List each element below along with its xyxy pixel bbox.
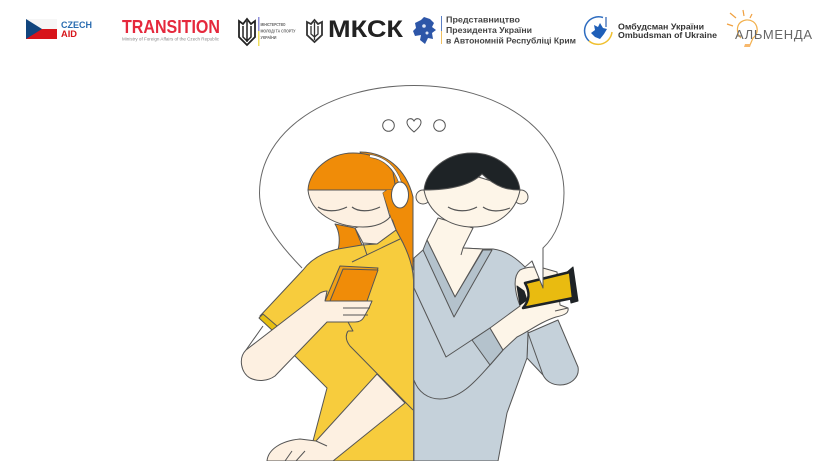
logo: Ministry of Youth and Sports: УКРАЇНИ <box>260 34 276 40</box>
logo: MKSK: МКСК <box>328 16 403 43</box>
logo: Ombudsman of Ukraine <box>585 17 718 44</box>
man ears <box>416 190 430 204</box>
logo: Transition: TRANSITION <box>122 16 220 37</box>
logo: Transition: Ministry of Foreign Affairs of the Czech Republic <box>122 36 220 42</box>
woman back hair <box>335 224 362 250</box>
woman torso and sleeve <box>260 230 414 461</box>
woman bottom forearm <box>267 374 405 461</box>
woman front hair <box>308 153 396 190</box>
woman neck <box>355 215 396 244</box>
logo: Ombudsman of Ukraine: Ombudsman of Ukraine <box>618 31 718 40</box>
woman right hair fill near headphone <box>383 190 397 220</box>
woman figure <box>241 152 414 461</box>
man eyes <box>448 207 510 211</box>
logo: Representation of the President of Ukraine in Crimea <box>413 16 576 46</box>
logo: Almenda <box>727 10 812 47</box>
woman face <box>308 190 390 227</box>
man phone back <box>566 267 578 303</box>
man phone left edge <box>517 286 527 305</box>
logo: Czech Aid: AID <box>61 29 78 39</box>
logo: Czech Aid: CZECH <box>61 20 92 30</box>
icon: left circle <box>383 120 394 131</box>
man face <box>424 175 520 227</box>
woman headphone <box>392 182 408 208</box>
man phone screen <box>523 272 573 308</box>
man hair <box>424 153 520 190</box>
speech bubble with heart and circles <box>260 86 564 288</box>
logo: Representation of the President of Ukraine in Crimea: в Автономній Республіці Крим <box>446 36 576 46</box>
woman eyes <box>318 207 380 211</box>
man arm outline <box>414 288 503 399</box>
logo: Ministry of Youth and Sports <box>239 17 296 46</box>
woman phone <box>325 266 378 301</box>
man neck <box>427 218 483 297</box>
logo: Czech Aid <box>26 19 92 39</box>
logo: Ministry of Youth and Sports: МІНІСТЕРСТВО <box>260 22 286 27</box>
woman left sleeve back line <box>246 326 263 350</box>
woman raised arm and hand <box>241 291 372 380</box>
man sleeve cuff <box>472 328 503 365</box>
icon: right circle <box>434 120 445 131</box>
logo: MKSK <box>307 16 403 43</box>
logo: Ministry of Youth and Sports: МОЛОДІ ТА СПОРТУ <box>260 28 296 34</box>
icon: heart <box>407 119 421 132</box>
woman cuff <box>259 314 277 331</box>
man torso <box>414 248 528 461</box>
center dividing line <box>413 262 415 461</box>
woman armpit line <box>346 331 413 410</box>
logo: Ombudsman of Ukraine: Омбудсман України <box>618 22 704 32</box>
bubble tail over phone <box>532 248 543 288</box>
woman right hair <box>360 152 413 270</box>
man figure <box>414 153 578 461</box>
man right sleeve <box>527 320 578 385</box>
man collar <box>423 240 492 317</box>
logo: Representation of the President of Ukraine in Crimea: Представництво <box>446 16 520 24</box>
woman headband <box>370 156 400 182</box>
man hand <box>490 267 568 350</box>
logo: Representation of the President of Ukraine in Crimea: Президента України <box>446 26 532 35</box>
logo: Almenda: АЛЬМЕНДА <box>735 27 812 42</box>
